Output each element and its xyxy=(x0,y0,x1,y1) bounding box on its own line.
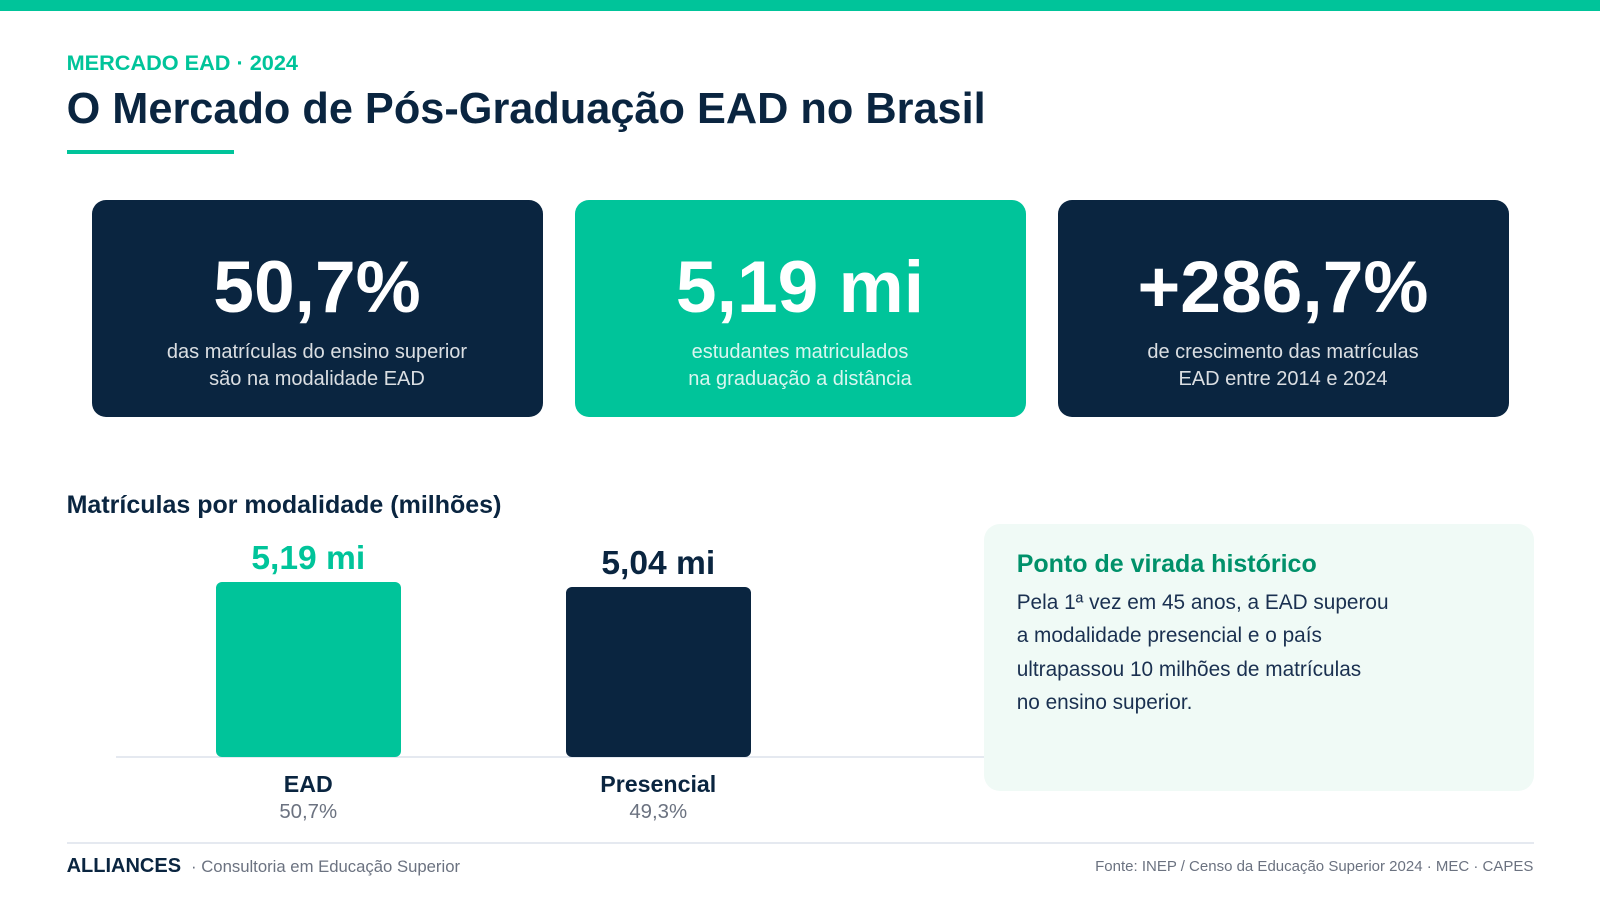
stat description: são na modalidade EAD xyxy=(209,368,425,390)
axis line xyxy=(116,756,984,758)
footer brand: ALLIANCES · Consultoria em Educação Superior xyxy=(67,855,460,877)
stat card: 50,7% xyxy=(92,200,543,417)
stat description: na graduação a distância xyxy=(688,368,912,390)
title: O Mercado de Pós-Graduação EAD no Brasil xyxy=(67,85,986,133)
bar: Presencial xyxy=(566,587,751,756)
chart heading: Matrículas por modalidade (milhões) xyxy=(67,491,501,519)
eyebrow label: MERCADO EAD · 2024 xyxy=(67,50,298,75)
callout heading: Ponto de virada histórico xyxy=(1017,550,1317,578)
top accent bar xyxy=(0,0,1600,11)
stat value: 50,7% xyxy=(213,246,421,328)
bar value: EAD: 5,19 mi xyxy=(251,540,365,577)
title underline xyxy=(67,150,234,154)
stat description: de crescimento das matrículas xyxy=(1147,341,1419,363)
stat description: estudantes matriculados xyxy=(692,341,908,363)
callout panel xyxy=(984,524,1534,791)
stat description: das matrículas do ensino superior xyxy=(167,341,467,363)
callout body: Pela 1ª vez em 45 anos, a EAD superou xyxy=(1017,590,1389,614)
stat value: +286,7% xyxy=(1138,246,1428,328)
bar: EAD xyxy=(216,582,401,756)
share: Presencial: 49,3% xyxy=(629,800,687,822)
callout body: no ensino superior. xyxy=(1017,691,1192,714)
bar chart xyxy=(116,540,984,822)
footer source: Fonte: INEP / Censo da Educação Superior 2024 · MEC · CAPES xyxy=(1095,858,1533,875)
callout body: ultrapassou 10 milhões de matrículas xyxy=(1017,658,1361,680)
stat value: 5,19 mi xyxy=(676,246,924,328)
bar value: Presencial: 5,04 mi xyxy=(601,545,715,582)
category label: Presencial: Presencial xyxy=(600,770,716,796)
stat description xyxy=(688,341,912,390)
footer rule xyxy=(67,842,1534,844)
stat card: +286,7% xyxy=(1058,200,1509,417)
stat description xyxy=(167,341,467,390)
stat description xyxy=(1147,341,1419,390)
callout body xyxy=(1017,590,1389,714)
stat card: 5,19 mi xyxy=(575,200,1026,417)
category label: EAD: EAD xyxy=(284,770,333,796)
share: EAD: 50,7% xyxy=(279,800,337,822)
callout body: a modalidade presencial e o país xyxy=(1017,624,1322,647)
stat description: EAD entre 2014 e 2024 xyxy=(1178,368,1388,390)
